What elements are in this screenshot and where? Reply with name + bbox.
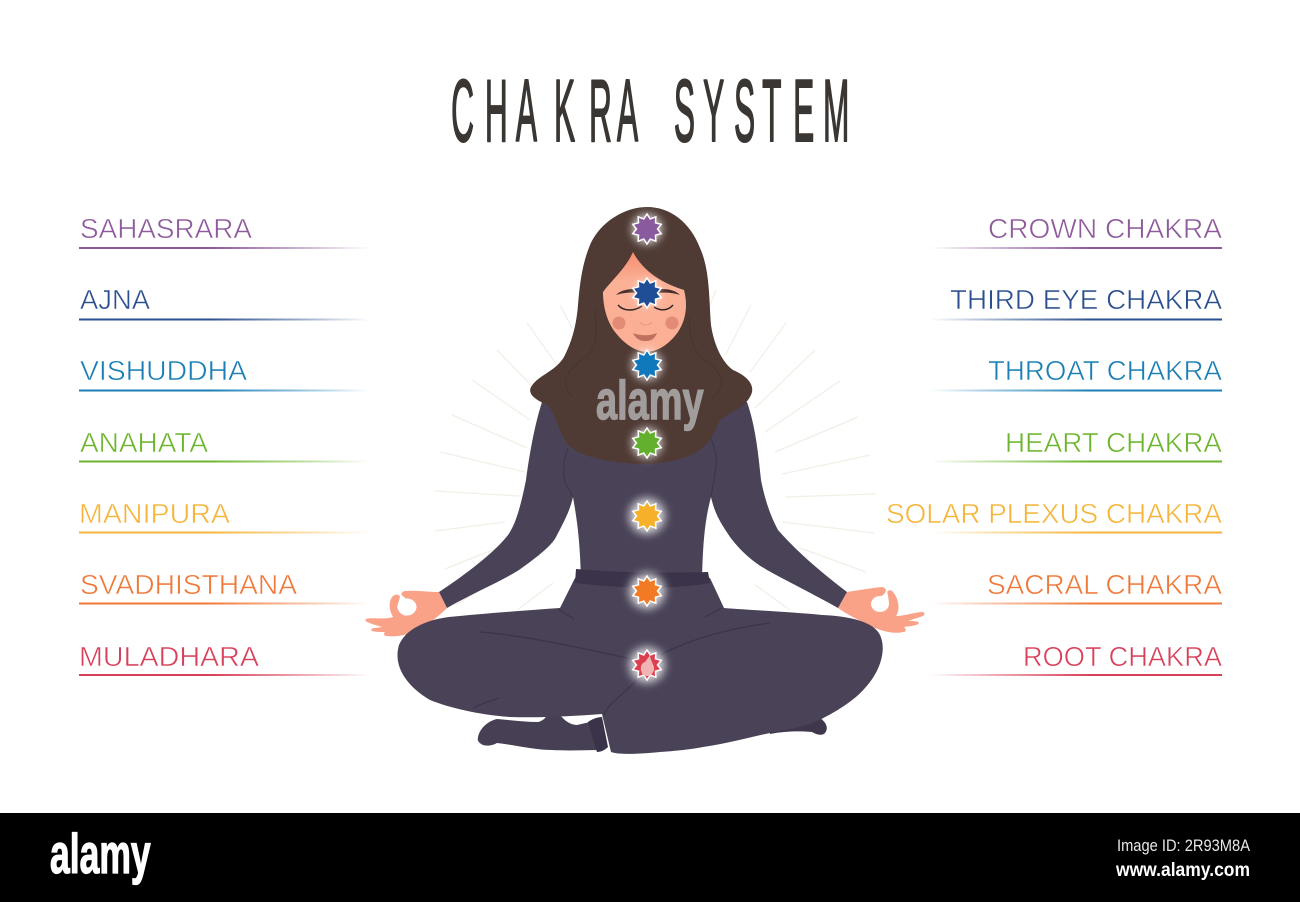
right labels: english names — [886, 213, 1223, 676]
chakra glows — [629, 214, 665, 683]
footer bar — [0, 813, 1300, 902]
sacral chakra star — [633, 576, 661, 606]
torso contour lines — [564, 425, 716, 497]
root chakra star — [633, 650, 661, 680]
throat chakra star — [633, 350, 661, 380]
label: Third eye chakra: THIRD EYE CHAKRA — [950, 284, 1223, 315]
right hand — [838, 587, 924, 633]
cheeks — [612, 316, 678, 330]
label: Svadhisthana: SVADHISTHANA — [80, 569, 298, 600]
left labels: sanskrit names — [79, 213, 370, 676]
solar plexus chakra star — [633, 501, 661, 531]
title: CHAKRA SYSTEM — [451, 62, 849, 161]
label: Manipura: MANIPURA — [79, 498, 231, 529]
crown chakra star — [633, 214, 661, 244]
label: Muladhara: MULADHARA — [79, 641, 260, 672]
heart chakra star — [633, 428, 661, 458]
label: Ajna: AJNA — [80, 284, 151, 315]
footer image id: Image ID: 2R93M8A — [1117, 836, 1251, 855]
footer url: www.alamy.com — [1115, 860, 1250, 881]
eyebrows — [616, 289, 680, 295]
belt — [575, 569, 710, 588]
label: Root chakra: ROOT CHAKRA — [1023, 641, 1223, 672]
meditating figure — [365, 207, 924, 754]
footer logo: alamy — [50, 823, 151, 885]
label: Anahata: ANAHATA — [80, 427, 209, 458]
right foot — [770, 718, 827, 735]
leg fold lines — [473, 608, 770, 715]
mouth — [633, 333, 657, 341]
left hand — [365, 591, 447, 636]
hair strand lines — [566, 308, 721, 398]
radiating rays — [435, 290, 876, 610]
hair — [530, 207, 752, 464]
label: Throat chakra: THROAT CHAKRA — [988, 355, 1223, 386]
label: Solar plexus chakra: SOLAR PLEXUS CHAKRA — [886, 498, 1223, 529]
label: Sacral chakra: SACRAL CHAKRA — [987, 569, 1223, 600]
trouser cuff — [588, 717, 608, 752]
crossed legs — [397, 578, 883, 754]
third eye chakra star — [633, 278, 661, 308]
closed eyes — [618, 305, 673, 310]
torso and arms — [439, 402, 847, 608]
label: Heart chakra: HEART CHAKRA — [1005, 427, 1223, 458]
left foot — [478, 715, 600, 750]
face — [603, 252, 686, 352]
label: Sahasrara: SAHASRARA — [80, 213, 253, 244]
label: Crown chakra: CROWN CHAKRA — [988, 213, 1223, 244]
label: Vishuddha: VISHUDDHA — [80, 355, 248, 386]
nose — [640, 322, 652, 325]
watermark: alamy — [596, 369, 704, 431]
